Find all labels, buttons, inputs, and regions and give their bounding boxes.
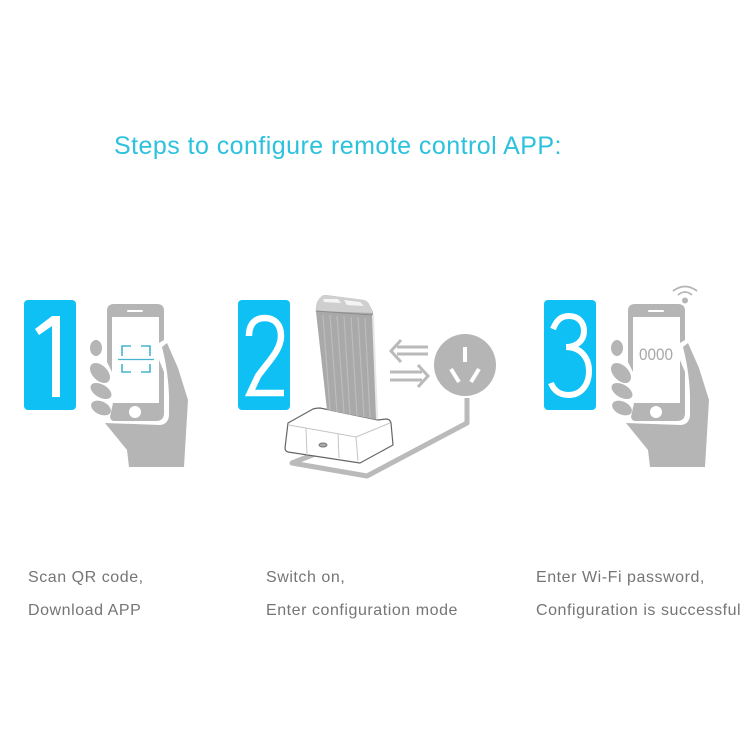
step 2 badge <box>238 300 290 410</box>
power bank device <box>316 295 378 420</box>
step 1 badge <box>24 300 76 410</box>
icon: power socket <box>434 334 496 396</box>
arrows left and right <box>390 340 428 387</box>
charging dock <box>285 408 393 463</box>
title: Steps to configure remote control APP: <box>114 132 562 160</box>
icon: wifi signal <box>673 286 697 304</box>
step 1 hand holding phone <box>86 304 188 467</box>
caption step 3 <box>536 569 741 619</box>
caption step 1 <box>28 569 144 619</box>
caption step 1: Download APP <box>28 602 141 619</box>
cable <box>292 398 467 476</box>
icon: QR scan frame <box>118 346 154 372</box>
caption step 2: Switch on, <box>266 569 345 586</box>
caption step 3: Configuration is successful <box>536 602 741 619</box>
step 3 hand holding phone <box>607 304 709 467</box>
caption step 1: Scan QR code, <box>28 569 144 586</box>
caption step 2 <box>266 569 458 619</box>
caption step 3: Enter Wi-Fi password, <box>536 569 705 586</box>
passcode 0000: 0000 <box>639 345 673 364</box>
caption step 2: Enter configuration mode <box>266 602 458 619</box>
step 3 badge <box>544 300 596 410</box>
